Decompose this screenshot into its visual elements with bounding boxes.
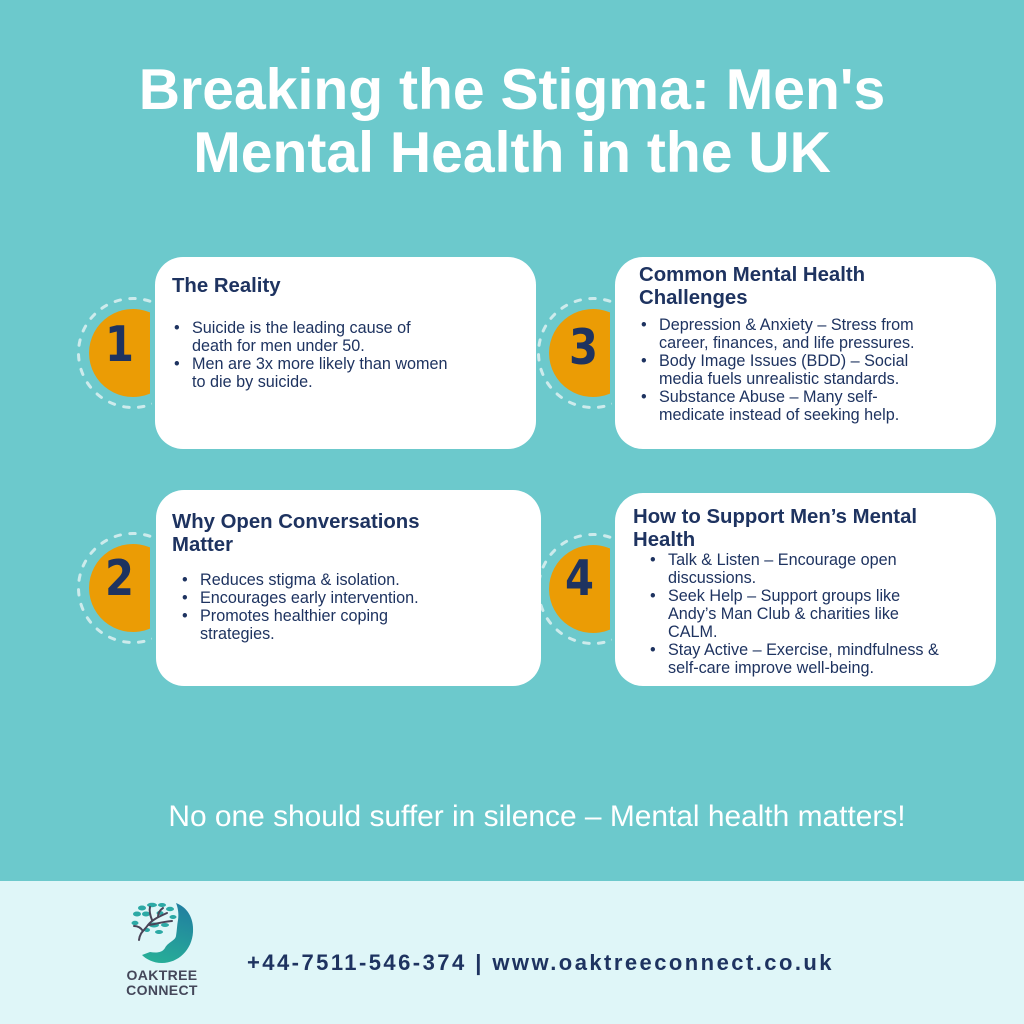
- bullet list: challenges: Depression & Anxiety – Stress from: [659, 316, 914, 334]
- number badge 4: 4: [565, 550, 594, 607]
- bullet list: why open conversations: strategies.: [200, 625, 275, 643]
- bullet list: why open conversations: Promotes healthier coping: [200, 607, 388, 625]
- heading: why open conversations matter: [172, 511, 420, 556]
- heading: common mental health challenges: Common Mental Health: [639, 264, 865, 286]
- bullet list: how to support: Stay Active – Exercise, mindfulness &: [668, 641, 939, 659]
- panel: common mental health challenges: [615, 257, 996, 449]
- bullet list: challenges: career, finances, and life pressures.: [659, 334, 915, 352]
- bullet list: challenges: media fuels unrealistic standards.: [659, 370, 899, 388]
- number badge 1: 1: [105, 316, 134, 373]
- logo wordmark: CONNECT: [126, 982, 198, 998]
- logo: oaktree connect: [126, 902, 198, 998]
- footer band: [0, 881, 1024, 1024]
- bullet list: challenges: Substance Abuse – Many self-: [659, 388, 878, 406]
- contact details: +44-7511-546-374 | www.oaktreeconnect.co.uk: [247, 950, 834, 975]
- panel: the reality: •: [174, 319, 180, 337]
- title: Breaking the Stigma: Men's: [139, 58, 885, 122]
- panel: why open conversations matter: •: [182, 571, 188, 589]
- bullet list: how to support: Seek Help – Support groups like: [668, 587, 900, 605]
- bullet list: challenges: Body Image Issues (BDD) – Social: [659, 352, 908, 370]
- icon: head and tree: [132, 902, 194, 963]
- bullet list: how to support: self-care improve well-being.: [668, 659, 874, 677]
- title: Mental Health in the UK: [193, 121, 831, 185]
- number badge 4: [541, 533, 612, 645]
- bullet list: the reality: death for men under 50.: [192, 337, 365, 355]
- bullet list: how to support: CALM.: [668, 623, 717, 641]
- number badge 3: 3: [569, 319, 598, 376]
- bullet list: why open conversations: Reduces stigma & isolation.: [200, 571, 400, 589]
- logo wordmark: [126, 967, 198, 998]
- panel: the reality: [155, 257, 536, 449]
- panel: how to support men's mental health: [615, 493, 996, 686]
- bullet list: the reality: [174, 319, 448, 391]
- bullet list: why open conversations: [182, 571, 419, 643]
- bullet list: how to support: discussions.: [668, 569, 756, 587]
- bullet list: why open conversations: Encourages early intervention.: [200, 589, 419, 607]
- panel: why open conversations matter: [156, 490, 541, 686]
- heading: why open conversations matter: Why Open Conversations: [172, 511, 420, 533]
- panel: how to support men's mental health: •: [650, 551, 656, 569]
- heading: how to support: [633, 506, 917, 551]
- bullet list: how to support: Talk & Listen – Encourage open: [668, 551, 897, 569]
- heading: how to support: Health: [633, 529, 695, 551]
- panel: the reality: •: [174, 355, 180, 373]
- title: [139, 58, 885, 185]
- panel: common mental health challenges: •: [641, 352, 647, 370]
- bullet list: how to support: Andy’s Man Club & charities like: [668, 605, 899, 623]
- number badge 2: 2: [105, 550, 134, 607]
- panel: common mental health challenges: •: [641, 316, 647, 334]
- panel: why open conversations matter: •: [182, 607, 188, 625]
- heading: why open conversations matter: Matter: [172, 534, 233, 556]
- bullet list: challenges: [641, 316, 915, 424]
- panel: how to support men's mental health: •: [650, 641, 656, 659]
- number badge 3: [537, 297, 612, 409]
- heading: how to support: How to Support Men’s Mental: [633, 506, 917, 528]
- bullet list: the reality: Men are 3x more likely than women: [192, 355, 448, 373]
- panel: common mental health challenges: •: [641, 388, 647, 406]
- heading: common mental health challenges: [639, 264, 865, 309]
- bullet list: the reality: to die by suicide.: [192, 373, 313, 391]
- number badge 2: [77, 532, 152, 644]
- closing message: No one should suffer in silence – Mental health matters!: [168, 800, 906, 833]
- heading: common mental health challenges: Challenges: [639, 287, 748, 309]
- bullet list: challenges: medicate instead of seeking help.: [659, 406, 899, 424]
- panel: how to support men's mental health: •: [650, 587, 656, 605]
- number badge 1: [77, 297, 152, 409]
- logo wordmark: OAKTREE: [127, 967, 197, 983]
- heading: the reality: The Reality: [172, 275, 281, 297]
- bullet list: how to support: [650, 551, 939, 677]
- bullet list: the reality: Suicide is the leading cause of: [192, 319, 411, 337]
- panel: why open conversations matter: •: [182, 589, 188, 607]
